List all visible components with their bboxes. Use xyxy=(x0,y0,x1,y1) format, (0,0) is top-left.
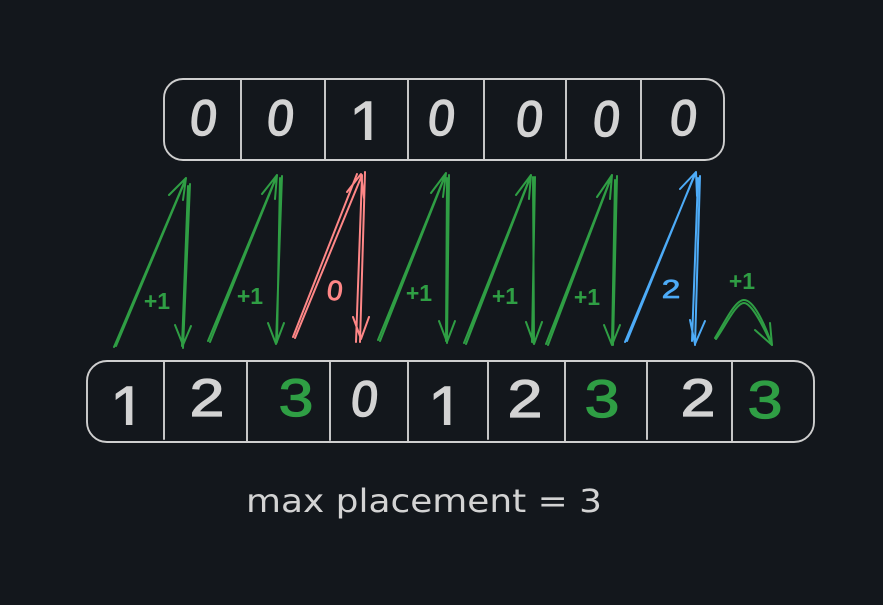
bottom array xyxy=(87,361,814,446)
arrow pair 6: +1: +1 xyxy=(574,284,600,310)
top array values: 1 xyxy=(349,87,385,161)
bottom array values xyxy=(116,378,780,425)
bottom array values: 3 xyxy=(279,370,313,428)
arrow pair 2: +1 xyxy=(208,175,284,344)
arrow pair 1: +1: +1 xyxy=(144,288,170,314)
arrow pair 3: 0 (red): 0 xyxy=(325,274,345,307)
arrow pair 6: +1 xyxy=(546,175,620,345)
top array values xyxy=(191,99,696,140)
arrow pair 5: +1: +1 xyxy=(492,283,518,309)
arrow pair 3: 0 (red) xyxy=(293,172,369,342)
caption: max placement = 3 xyxy=(246,482,602,520)
arrow pair 4: +1: +1 xyxy=(406,280,432,306)
arrow pair 7: 2 (blue) xyxy=(625,172,705,345)
arrow pair 2: +1: +1 xyxy=(237,283,263,309)
bottom array values: 0 xyxy=(349,372,381,427)
top array values: 0 xyxy=(426,91,458,146)
arrow pair 7: 2 (blue): 2 xyxy=(662,276,680,304)
top array values: 0 xyxy=(188,91,220,146)
top array xyxy=(164,79,724,161)
top array values: 0 xyxy=(668,91,700,146)
bottom array values: 1 xyxy=(428,372,464,446)
bottom array values: 2 xyxy=(190,370,224,428)
bottom array frame xyxy=(87,361,814,442)
top array values: 0 xyxy=(265,91,297,146)
top array values: 0 xyxy=(514,92,546,147)
bottom array values: 2 xyxy=(508,371,542,429)
top array frame xyxy=(164,79,724,160)
top array values: 0 xyxy=(591,92,623,147)
bottom array values: 3 xyxy=(585,371,619,429)
bottom array values: 1 xyxy=(110,372,146,446)
arrow pair 1: +1 xyxy=(114,178,191,348)
arrow pair 4: +1 xyxy=(378,173,455,343)
arrow 8: +1 curve: +1 xyxy=(729,268,755,294)
bottom array values: 3 xyxy=(748,372,782,430)
arrow pair 5: +1 xyxy=(464,175,542,344)
bottom array values: 2 xyxy=(681,370,715,428)
arrow 8: +1 curve xyxy=(715,268,772,345)
